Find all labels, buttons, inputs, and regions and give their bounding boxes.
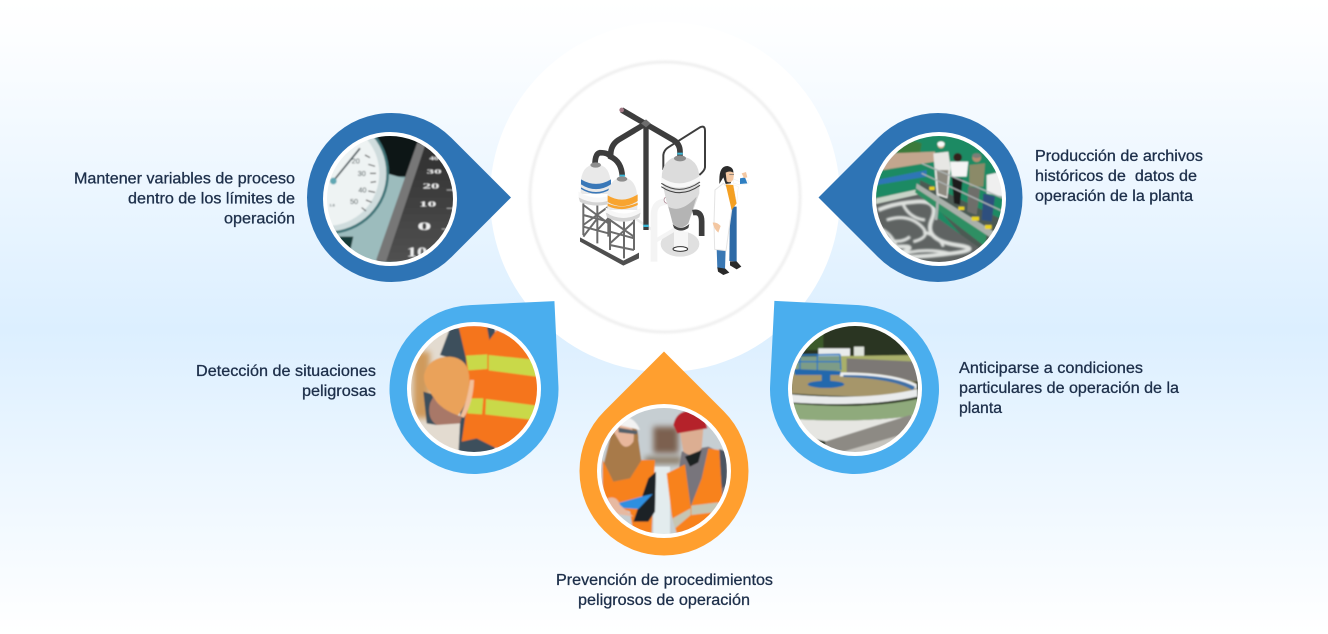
central ring: [530, 62, 800, 332]
pipe network: [595, 110, 680, 177]
photo: people on walkway over aeration tank: [876, 136, 1002, 262]
vertical post: [643, 122, 649, 230]
thin loop pipe: [663, 127, 705, 175]
right vessel: [662, 156, 699, 227]
photo: pressure gauge: 10: [419, 200, 437, 209]
text: producción de archivos: Producción de archivos: [1035, 148, 1203, 165]
person white shirt: [933, 152, 951, 198]
scientist: [713, 166, 748, 275]
text: detección: [196, 363, 376, 400]
text: producción de archivos: históricos de datos de: [1035, 168, 1197, 185]
photo: pressure gauge: 40: [429, 156, 439, 162]
left tower frame: [583, 203, 634, 258]
base plate: [580, 237, 639, 266]
photo: pressure gauge: 20: [423, 182, 441, 190]
person vest: [969, 163, 985, 187]
photo: pressure gauge: 40: [358, 185, 366, 194]
photo: worker holding helmet in orange vest: [411, 326, 537, 452]
text: mantener variables: Mantener variables de proceso: [74, 170, 295, 188]
photo: pressure gauge: 0: [417, 219, 431, 233]
text: mantener variables: operación: [224, 210, 295, 228]
man: [678, 446, 727, 532]
text: prevención: [556, 572, 773, 609]
text: anticiparse: planta: [959, 400, 1002, 417]
photo: pressure gauge: [327, 136, 453, 262]
text: prevención: Prevención de procedimientos: [556, 572, 773, 589]
pin: two supervisors (orange): [580, 351, 748, 556]
icon: treatment plant illustration with scientist: [578, 108, 748, 275]
photo: pressure gauge: 20: [352, 156, 360, 165]
text: mantener variables: [74, 170, 295, 228]
photo: pressure gauge: 30: [358, 169, 366, 178]
text: anticiparse: particulares de operación de la: [959, 380, 1179, 397]
pin: treatment tank inspection (dark blue): [818, 113, 1023, 282]
photo: pressure gauge: 1.6: [329, 202, 336, 207]
text: anticiparse: [959, 360, 1179, 417]
central white halo circle: [490, 22, 840, 372]
person dark hair: [950, 162, 968, 177]
text: detección: peligrosas: [302, 383, 376, 400]
text: producción de archivos: operación de la planta: [1035, 188, 1193, 205]
white return pipe: [654, 202, 667, 262]
pin: circular clarifier (light blue): [770, 300, 939, 474]
pin: hard hat and vest (light blue): [390, 301, 558, 474]
photo: pressure gauge: 30: [427, 168, 442, 175]
photo: pressure gauge: 50: [350, 197, 358, 206]
photo: circular clarifier tank: [792, 326, 918, 452]
photo: pressure gauge: 10: [407, 246, 427, 261]
text: prevención: peligrosos de operación: [578, 592, 750, 609]
text: detección: Detección de situaciones: [196, 363, 376, 380]
text: producción de archivos: [1035, 148, 1203, 205]
tank orange: [607, 177, 637, 210]
text: mantener variables: dentro de los límites de: [128, 190, 295, 208]
text: anticiparse: Anticiparse a condiciones: [959, 360, 1143, 377]
woman: [603, 428, 642, 483]
tank blue: [581, 164, 611, 194]
person right: [987, 172, 1003, 197]
pin: gauge (dark blue): [307, 113, 511, 282]
photo: two workers in helmets and vests: [601, 408, 727, 534]
